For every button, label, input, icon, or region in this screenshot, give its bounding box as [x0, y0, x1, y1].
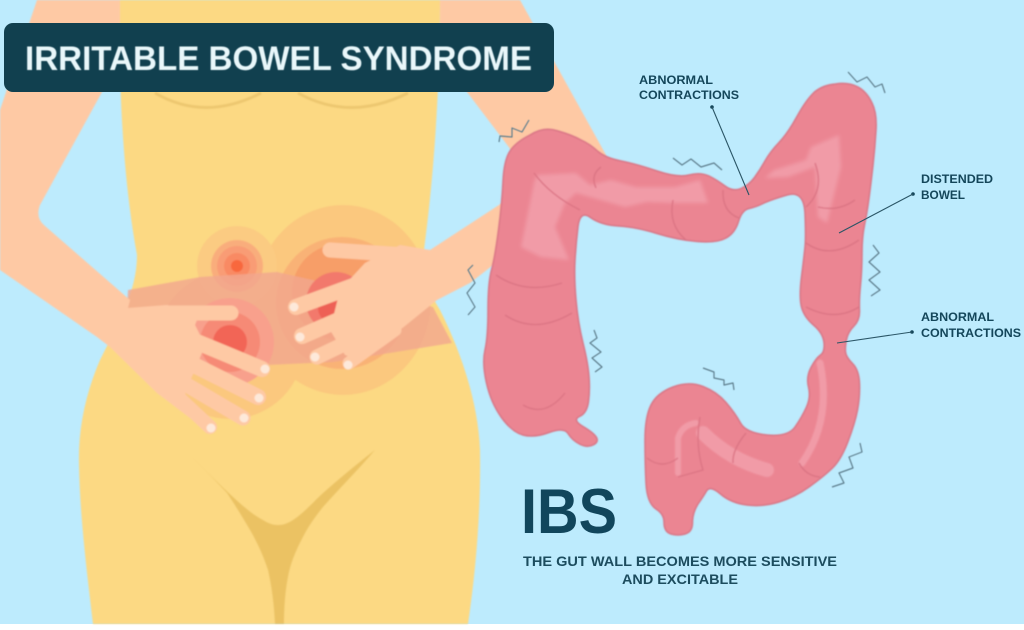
figure: female torso with arms [0, 0, 606, 624]
description [523, 554, 837, 587]
callout: abnormal contractions right: CONTRACTIONS [921, 328, 1021, 340]
groin crease [188, 450, 375, 624]
underwear waistband [127, 272, 452, 365]
right fingernails [290, 302, 352, 370]
callout: abnormal contractions top [639, 75, 749, 195]
colon illustration [484, 83, 876, 535]
breast lines [155, 93, 408, 108]
callout: distended bowel [839, 174, 993, 233]
colon highlights [521, 135, 841, 260]
colon creases [496, 163, 859, 477]
callout: distended bowel: BOWEL [921, 190, 965, 202]
heading: IBS: IBS [521, 477, 617, 547]
callout: abnormal contractions right [837, 312, 1021, 343]
torso [79, 0, 480, 624]
squiggles: spasm marks [467, 72, 885, 487]
colon body [484, 83, 876, 535]
callout: abnormal contractions top: CONTRACTIONS [639, 90, 739, 102]
callout: abnormal contractions top: ABNORMAL [639, 75, 713, 87]
callout: abnormal contractions right: ABNORMAL [921, 312, 994, 324]
callout: distended bowel: DISTENDED [921, 174, 993, 186]
title text: IRRITABLE BOWEL SYNDROME [25, 40, 532, 78]
pain spots above band [211, 237, 408, 369]
pain glow: outer rings [156, 205, 431, 419]
right arm and hand [296, 0, 606, 363]
pain spots on band [186, 272, 366, 386]
description: AND EXCITABLE [622, 572, 738, 587]
left arm and hand [0, 0, 262, 427]
title banner [4, 23, 554, 92]
description: THE GUT WALL BECOMES MORE SENSITIVE [523, 554, 837, 569]
left fingernails [206, 364, 270, 432]
